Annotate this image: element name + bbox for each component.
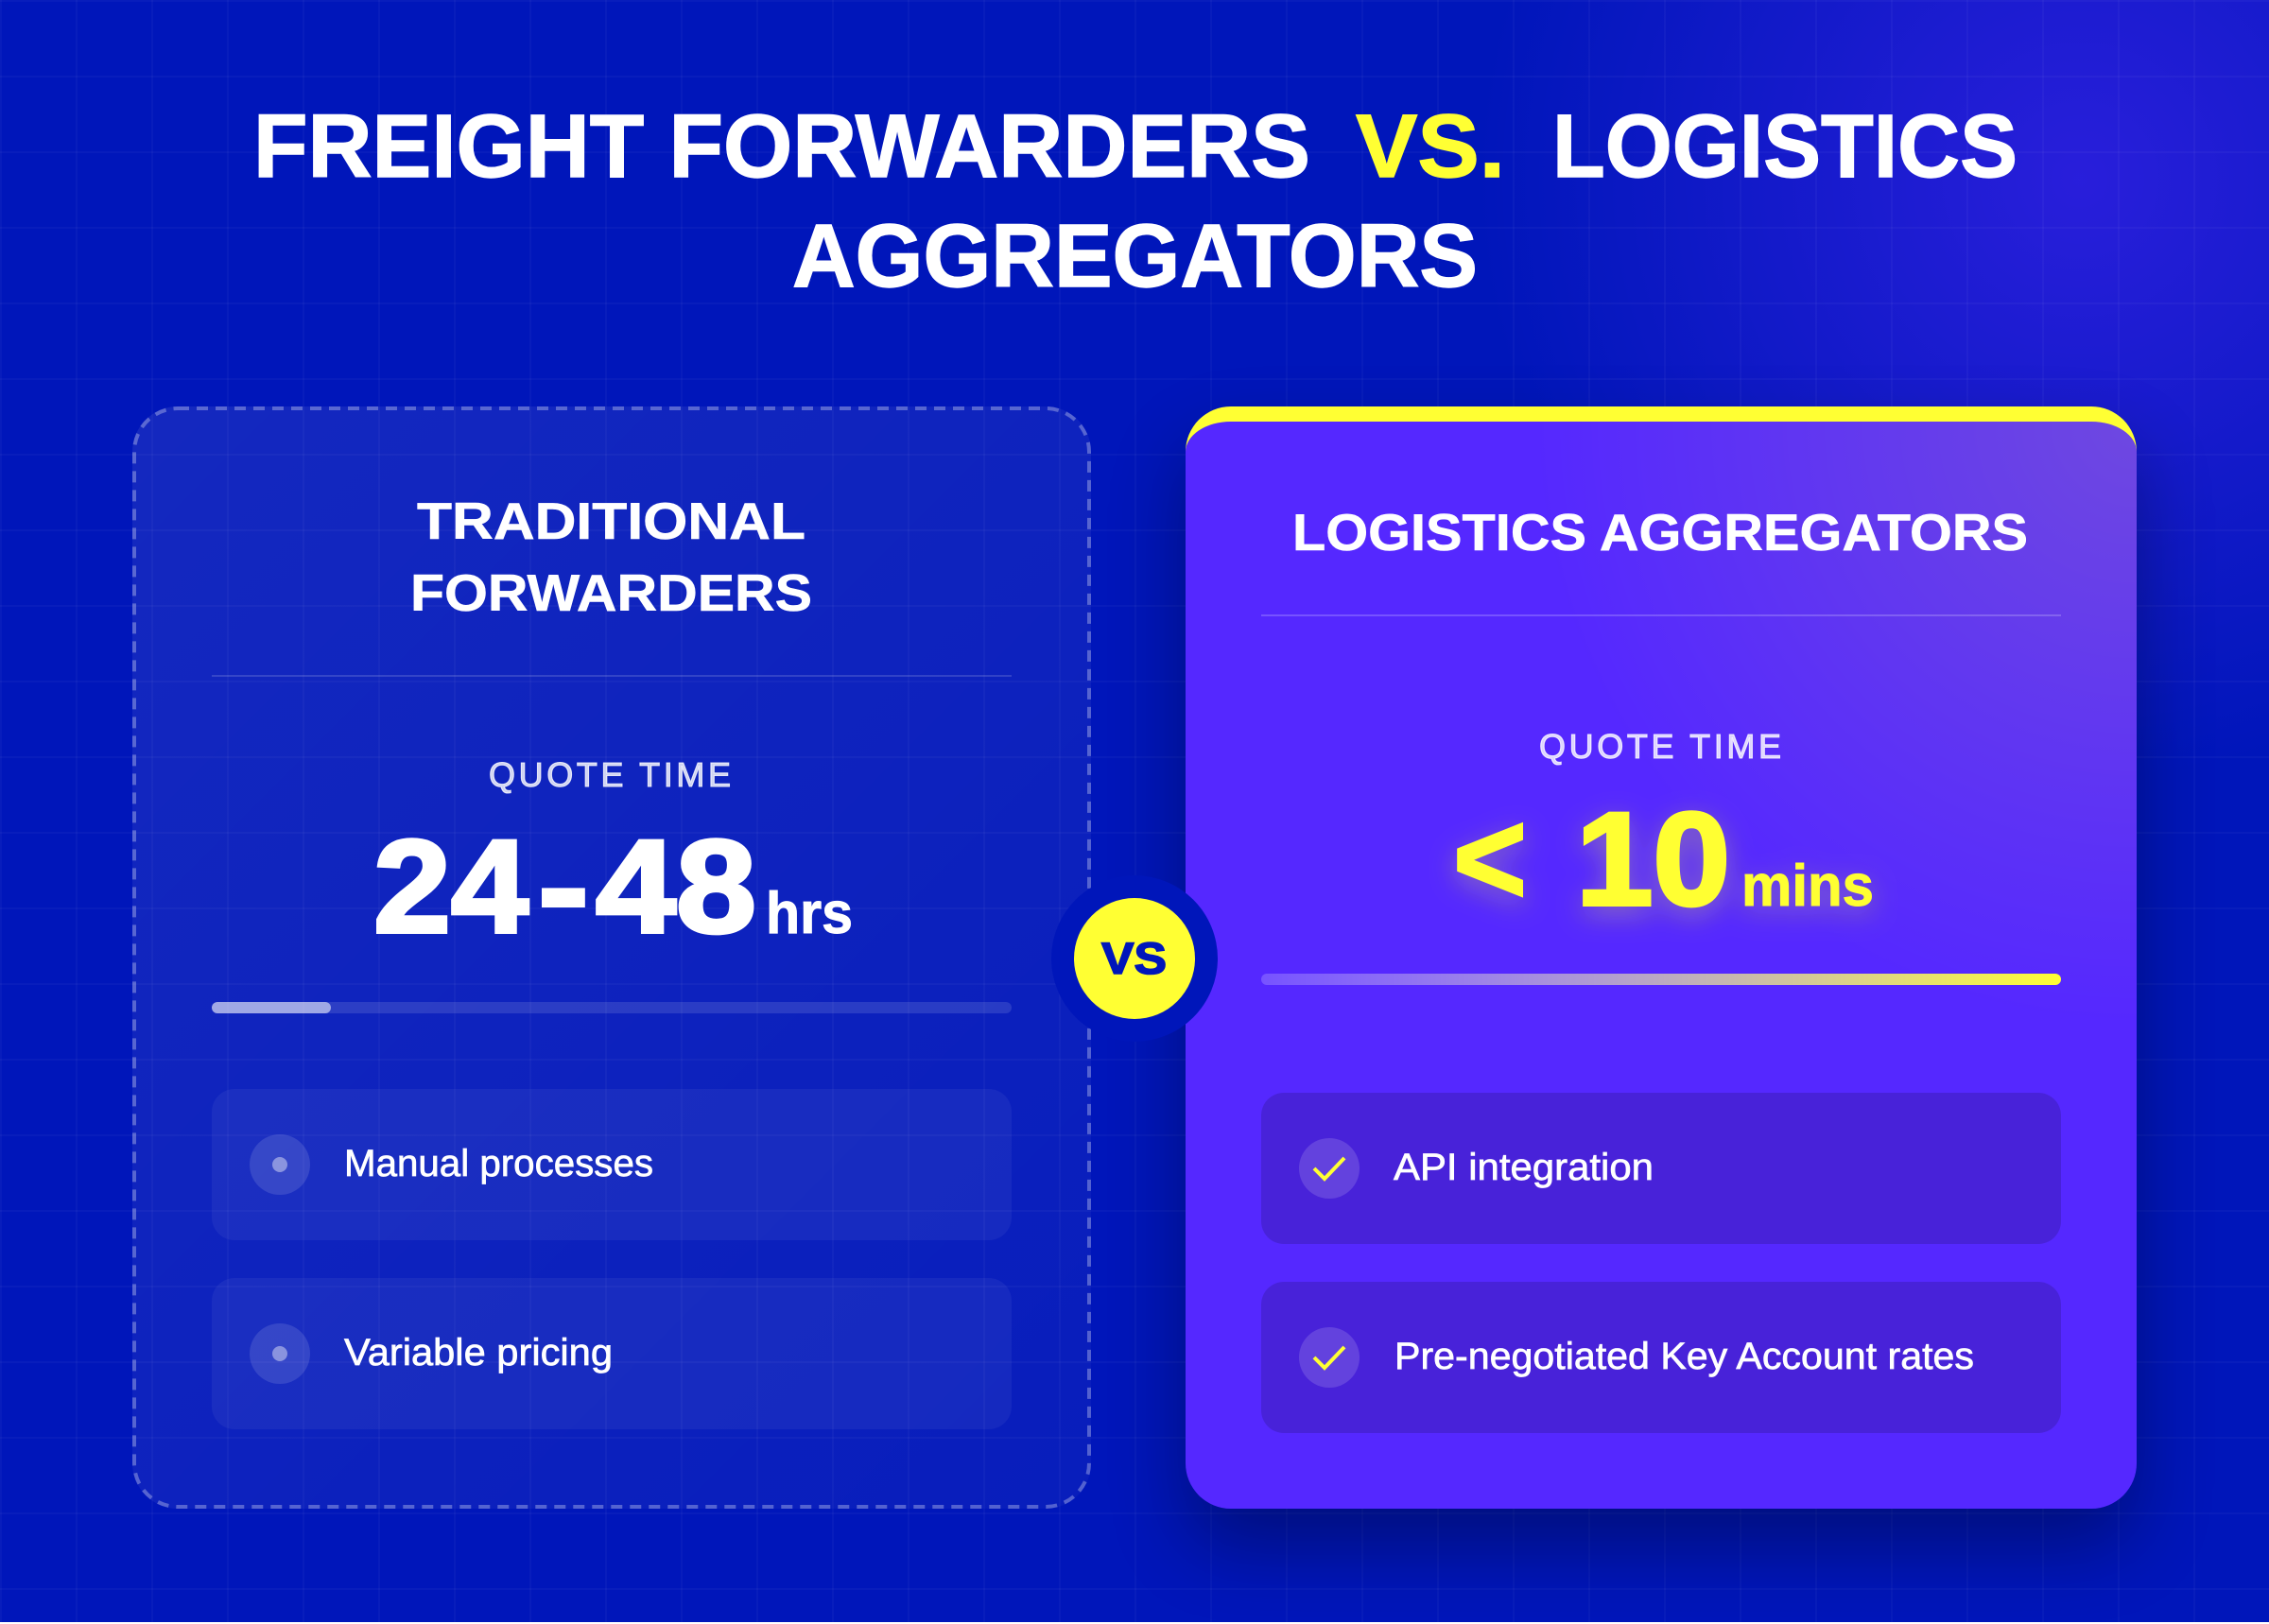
panel: logistics aggregators <box>1186 406 2137 1509</box>
row: manual processes <box>212 1089 1012 1240</box>
panel heading: traditional forwarders: FORWARDERS <box>410 563 812 622</box>
row: api integration <box>1261 1093 2061 1244</box>
progress bar: 15 percent <box>212 1002 1012 1013</box>
metric: under 10 mins: < <box>1453 784 1527 932</box>
metric: 24-48 hrs: hrs <box>766 881 853 946</box>
metric: 24-48 hrs: - <box>538 812 589 960</box>
label: quote time: QUOTE TIME <box>1539 727 1781 766</box>
row: variable pricing: Variable pricing <box>344 1332 613 1373</box>
icon: check <box>1299 1327 1360 1388</box>
icon: dot <box>250 1134 310 1195</box>
icon: dot <box>250 1323 310 1384</box>
title: LOGISTICS <box>1552 96 2018 197</box>
row: pre-negotiated key account rates <box>1261 1282 2061 1433</box>
title: FREIGHT FORWARDERS <box>253 96 1310 197</box>
metric: under 10 mins: 10 <box>1576 785 1730 933</box>
icon: check <box>1299 1138 1360 1199</box>
title <box>253 96 2018 306</box>
row: api integration: API integration <box>1394 1147 1654 1188</box>
panel heading: logistics aggregators: LOGISTICS AGGREGATORS <box>1292 503 2028 561</box>
row: variable pricing <box>212 1278 1012 1429</box>
metric: under 10 mins <box>1453 784 1874 933</box>
vs badge: VS <box>1101 933 1167 983</box>
panel heading: traditional forwarders <box>410 492 812 622</box>
metric: under 10 mins: mins <box>1741 854 1874 919</box>
label: quote time: QUOTE TIME <box>489 755 731 794</box>
panel: traditional forwarders <box>132 406 1091 1509</box>
title: VS. <box>1356 96 1505 197</box>
metric: 24-48 hrs: 24 <box>373 812 528 960</box>
panel heading: traditional forwarders: TRADITIONAL <box>417 492 805 550</box>
metric: 24-48 hrs: 48 <box>596 812 756 960</box>
title: AGGREGATORS <box>792 206 1478 306</box>
row: manual processes: Manual processes <box>344 1143 653 1184</box>
metric: 24-48 hrs <box>373 812 853 960</box>
row: pre-negotiated key account rates: Pre-negotiated Key Account rates <box>1394 1336 1974 1377</box>
progress bar: full <box>1261 974 2061 985</box>
vs badge <box>1051 876 1218 1040</box>
